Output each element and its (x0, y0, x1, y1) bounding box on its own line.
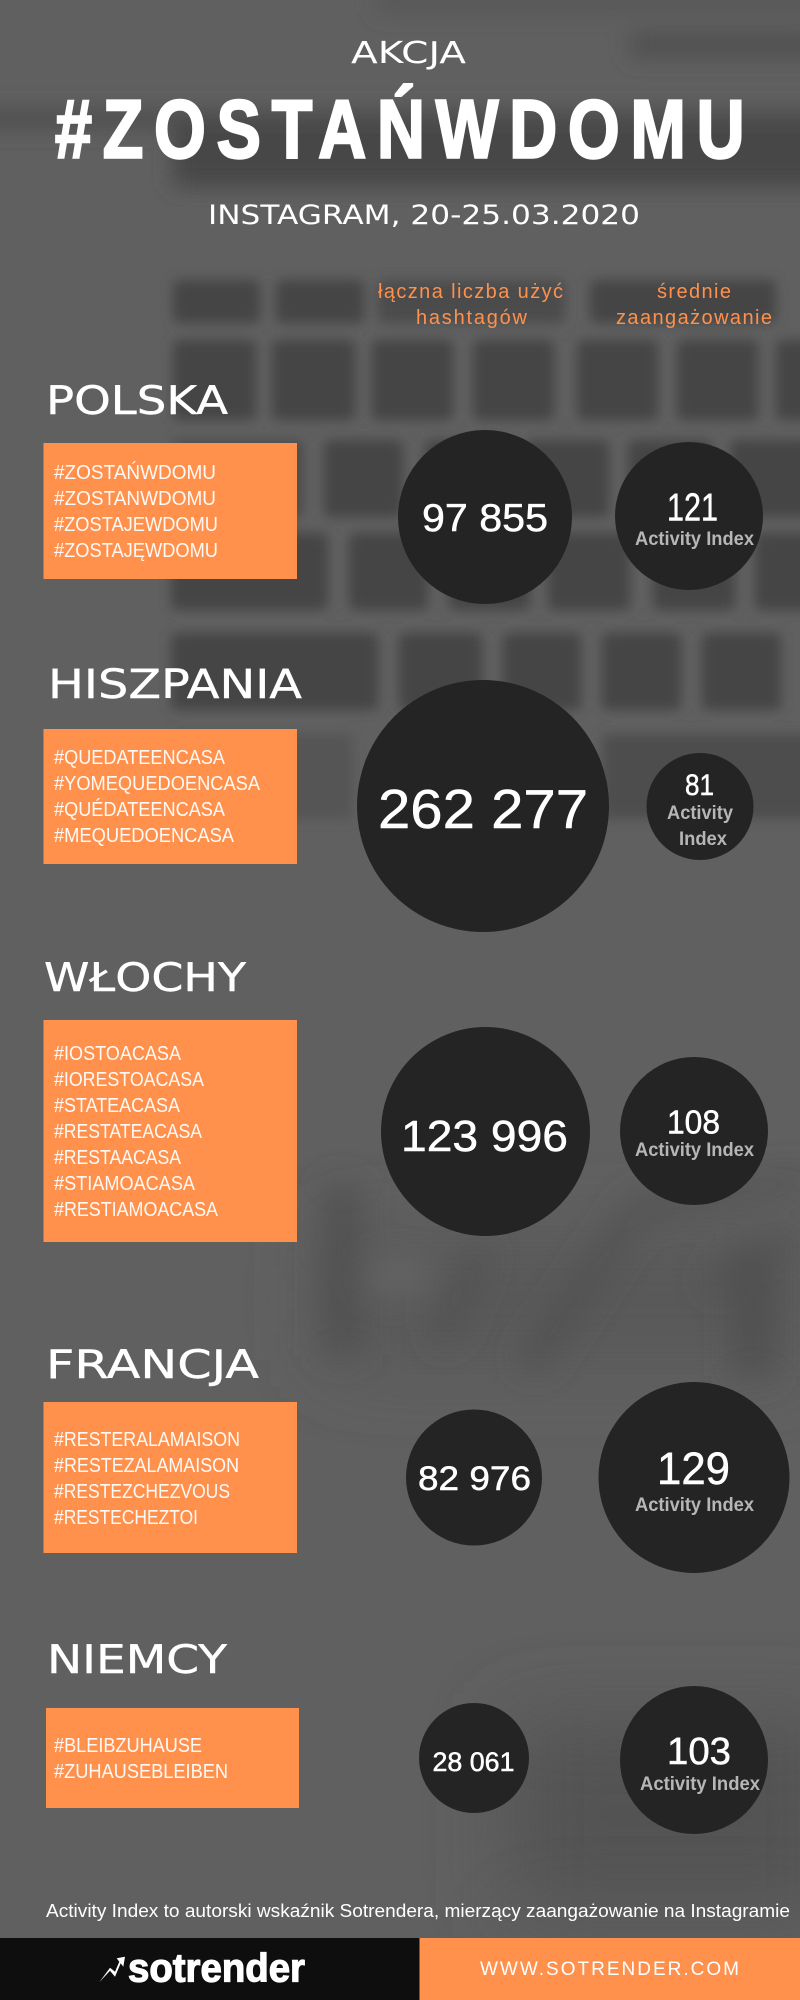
heading: WŁOCHY (44, 956, 246, 1001)
hashtag box: #QUÉDATEENCASA (54, 798, 226, 821)
heading: HISZPANIA (48, 662, 303, 708)
panel: Włochy (44, 956, 768, 1242)
panel: Francja (44, 1343, 790, 1573)
circle: total uses (406, 1410, 542, 1546)
main hashtag title: #ZOSTAŃWDOMU (55, 82, 745, 175)
hashtag box: #ZOSTANWDOMU (54, 488, 216, 510)
logo wordmark: sotrender (128, 1946, 305, 1990)
hashtag box: #RESTEZCHEZVOUS (54, 1481, 230, 1503)
hashtag box: #RESTIAMOACASA (54, 1199, 219, 1221)
circle: total uses (357, 680, 609, 932)
circle: total uses: 82 976 (418, 1460, 531, 1498)
circle: activity index (646, 753, 754, 860)
footer bar (0, 1938, 800, 2000)
circle: activity index (620, 1057, 768, 1205)
header: total hashtag uses: hashtagów (416, 307, 528, 329)
subtitle: INSTAGRAM, 20-25.03.2020 (208, 200, 640, 231)
hashtag box: #ZOSTAJEWDOMU (54, 514, 218, 536)
title block (55, 36, 745, 231)
hashtag box (44, 1402, 297, 1553)
header: average engagement (616, 281, 772, 329)
hashtag box: #ZOSTAŃWDOMU (54, 461, 216, 484)
panel: Niemcy (46, 1638, 768, 1834)
hashtag box: #RESTATEACASA (54, 1121, 203, 1143)
circle: total uses (381, 1027, 590, 1236)
column headers (378, 281, 772, 329)
hashtag box: #ZOSTAJĘWDOMU (54, 540, 218, 562)
header: total hashtag uses (378, 281, 563, 329)
hashtag box (46, 1708, 299, 1808)
footnote: Activity Index to autorski wskaźnik Sotrendera, mierzący zaangażowanie na Instagramie (46, 1901, 790, 1921)
header: average engagement: średnie (657, 281, 731, 303)
icon: sotrender arrow (99, 1957, 125, 1982)
heading: POLSKA (46, 379, 228, 424)
circle: activity index: 103 (667, 1731, 731, 1773)
circle: total uses: 28 061 (432, 1747, 514, 1777)
hashtag box (44, 1020, 297, 1242)
hashtag box: #STIAMOACASA (54, 1173, 196, 1195)
circle: total uses (419, 1703, 529, 1813)
circle: activity index: Activity Index (635, 529, 754, 550)
circle: total uses: 97 855 (422, 497, 548, 540)
hashtag box: #BLEIBZUHAUSE (54, 1735, 202, 1757)
circle: activity index: 81 (685, 769, 714, 802)
circle: activity index: Activity Index (635, 1140, 754, 1161)
circle: total uses: 262 277 (378, 778, 588, 840)
hashtag box: #YOMEQUEDOENCASA (54, 773, 261, 795)
header: total hashtag uses: łączna liczba użyć (378, 281, 563, 303)
hashtag box (44, 443, 297, 579)
hashtag box: #STATEACASA (54, 1095, 181, 1117)
header: average engagement: zaangażowanie (616, 307, 772, 329)
circle: activity index: Index (679, 829, 727, 850)
hashtag box: #QUEDATEENCASA (54, 747, 226, 769)
hashtag box: #IORESTOACASA (54, 1069, 205, 1091)
hashtag box: #RESTECHEZTOI (54, 1507, 198, 1529)
hashtag box: #ZUHAUSEBLEIBEN (54, 1761, 228, 1783)
circle: activity index: Activity (667, 803, 733, 824)
footer right: website (420, 1938, 800, 2000)
circle: activity index: 121 (667, 486, 718, 530)
kicker: AKCJA: AKCJA (351, 36, 467, 71)
hashtag box: #RESTERALAMAISON (54, 1429, 240, 1451)
footer right: website: WWW.SOTRENDER.COM (480, 1959, 739, 1980)
circle: activity index (620, 1686, 768, 1834)
heading: FRANCJA (46, 1343, 259, 1388)
footer left: logo (0, 1938, 420, 2000)
circle: activity index: 129 (657, 1443, 730, 1494)
heading: NIEMCY (47, 1638, 227, 1683)
circle: activity index (598, 1382, 790, 1573)
panel: Polska (44, 379, 763, 604)
circle: total uses (398, 430, 572, 604)
hashtag box: #MEQUEDOENCASA (54, 825, 235, 847)
hashtag box: #IOSTOACASA (54, 1043, 182, 1065)
circle: activity index: Activity Index (635, 1495, 754, 1516)
circle: total uses: 123 996 (401, 1112, 568, 1161)
hashtag box: #RESTEZALAMAISON (54, 1455, 239, 1477)
panel: Hiszpania (44, 662, 754, 932)
hashtag box (44, 729, 297, 864)
circle: activity index (615, 442, 763, 590)
circle: activity index: 108 (667, 1104, 720, 1140)
hashtag box: #RESTAACASA (54, 1147, 182, 1169)
circle: activity index: Activity Index (640, 1774, 760, 1795)
